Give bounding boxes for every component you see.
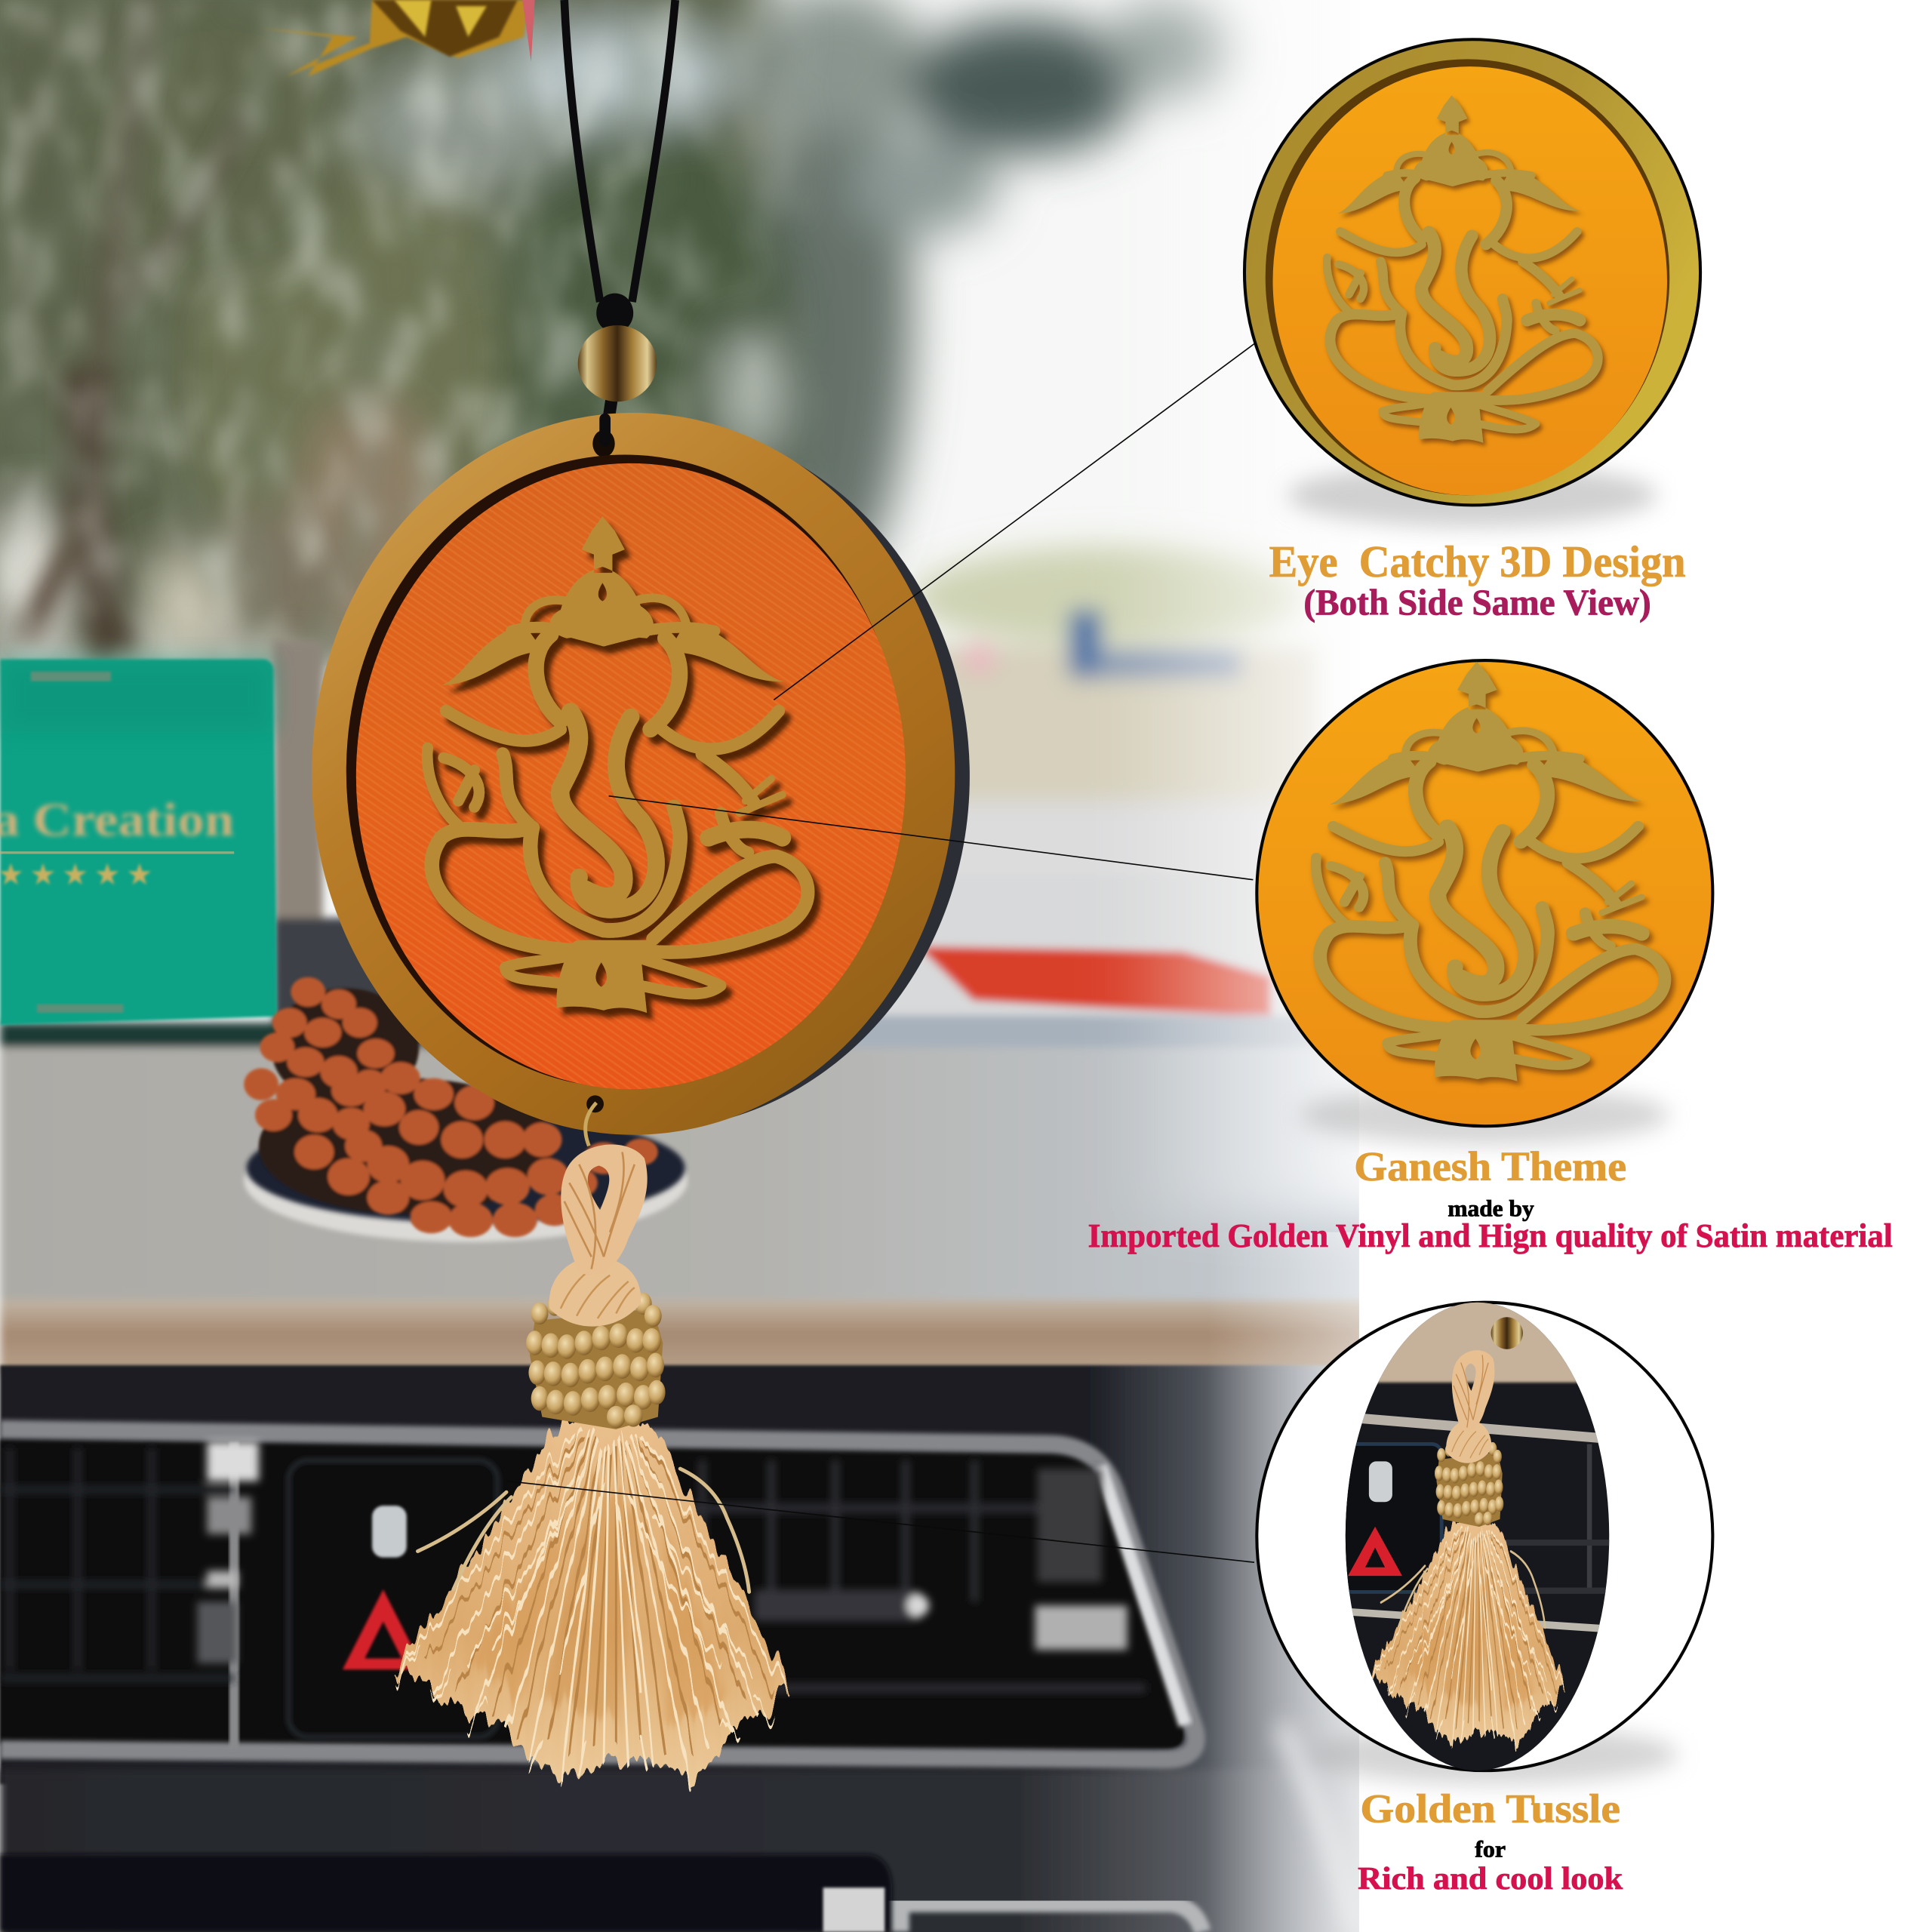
oval photo of tassel (1338, 1294, 1614, 1774)
text: Rich and cool look: Rich and cool look (1358, 1861, 1623, 1897)
vent openings (0, 1439, 1184, 1749)
golden tassel (394, 1144, 790, 1786)
heading: Ganesh Theme: Ganesh Theme (1354, 1144, 1626, 1190)
tree trunks (25, 0, 247, 653)
heading: Golden Tussle: Golden Tussle (1360, 1786, 1620, 1832)
orange satin (356, 463, 906, 1089)
subheading: Both Side Same View: (Both Side Same View) (1303, 582, 1651, 623)
rating stars: ★★★★★ (0, 858, 152, 892)
gold bead (578, 325, 657, 401)
rudraksha beads on disc (244, 977, 688, 1242)
chrome trim (0, 1429, 1196, 1759)
leader line to Ganesh theme (609, 796, 1253, 880)
pendant: Ganesh disc (312, 413, 970, 1135)
photo background: blurred car window scene (0, 0, 1359, 1932)
distant field and truck (912, 546, 1355, 937)
Ganesh icon (1316, 662, 1665, 1081)
icon: red hazard triangle (343, 1589, 424, 1669)
top gold ornament (260, 0, 535, 76)
panel: golden tassel detail (1257, 1294, 1712, 1784)
trees and sky (0, 0, 1232, 666)
Ganesh icon (1327, 95, 1598, 443)
left vent slats (0, 1441, 259, 1678)
hanging cord (565, 0, 675, 444)
gold ring (312, 413, 955, 1135)
gold rim circle (1244, 39, 1700, 505)
heading: Eye Catchy 3D Design: Eye Catchy 3D Design (1269, 537, 1685, 586)
panel: Ganesh theme detail (1257, 660, 1712, 1145)
black backing disc (324, 423, 970, 1130)
dark console with air vents (0, 1365, 1367, 1932)
text: material description: Imported Golden Vinyl and Hign quality of Satin material (1088, 1217, 1893, 1254)
text: made by: made by (1447, 1195, 1534, 1221)
leader line to 3D design (774, 344, 1254, 700)
lower dash panel (0, 1854, 892, 1932)
orange field (1273, 66, 1667, 495)
dashboard behind box (0, 641, 1367, 1374)
right vent slats (666, 1460, 1146, 1688)
white circle (1257, 1303, 1712, 1770)
teal box with brand text (0, 659, 277, 1025)
icon: lock button (372, 1506, 407, 1558)
white fade to right column (1109, 0, 1478, 1220)
panel: 3D design detail (1244, 39, 1700, 528)
jump ring (586, 1103, 596, 1146)
button panel (288, 1460, 498, 1737)
orange circle (1257, 660, 1712, 1126)
leader line to tassel (506, 1481, 1254, 1562)
text: for: for (1475, 1835, 1506, 1862)
foliage bokeh (0, 0, 785, 658)
Ganesh gold cutout (427, 516, 808, 1013)
